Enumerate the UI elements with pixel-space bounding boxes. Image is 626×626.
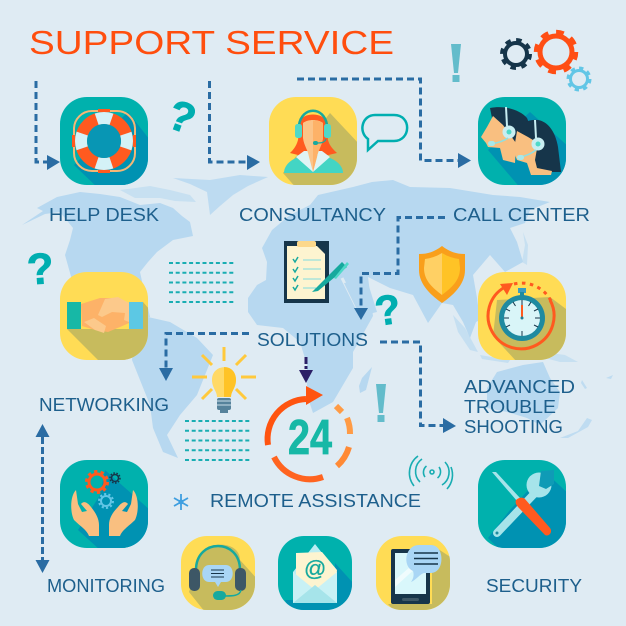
icon: headset [181,536,258,612]
icon: gears [502,32,590,90]
icon: help desk lifebuoy [60,97,150,190]
icon: 24 hours clock [268,386,350,479]
label: networking: NETWORKING [39,395,169,415]
icon: wireless signal [409,456,453,489]
label: help desk: HELP DESK [49,205,159,225]
label: consultancy: CONSULTANCY [239,205,386,225]
dotted lines lower [185,421,250,460]
icon: speech bubble outline [362,115,407,150]
label: call center: CALL CENTER [453,205,590,225]
arrow: call center to solutions [354,218,445,320]
arrow: solutions to troubleshooting [380,342,456,433]
label: advanced trouble shooting: ADVANCED [464,377,575,397]
dotted lines upper [169,263,235,302]
icon: security tools [478,460,570,550]
arrow: to call center [297,79,471,168]
icon: shield [419,246,465,303]
label: advanced trouble shooting: SHOOTING [464,417,563,437]
arrow: solutions to networking [159,334,249,381]
arrow: networking monitoring double arrow [36,424,50,573]
exclamation mark lower [376,384,386,422]
icon: asterisk [174,494,188,510]
label: remote assistance: REMOTE ASSISTANCE [210,491,421,511]
icon: monitoring hands and gears [60,460,150,550]
question mark left: ? [25,244,56,295]
icon: email envelope: @ [304,556,326,581]
icon: consultancy agent [269,97,360,190]
label: solutions: SOLUTIONS [257,330,368,350]
question mark near help desk: ? [162,90,202,143]
icon: email envelope [278,536,355,612]
icon: call center heads [478,97,570,190]
icon: clipboard and pen [284,241,349,303]
exclamation mark top [451,44,461,82]
icon: tablet chat [376,536,455,612]
arrow: solutions to 24 [299,357,313,383]
icon: stopwatch [478,272,570,362]
label: security: SECURITY [486,576,582,596]
arrow: to help desk [36,81,60,170]
label: monitoring: MONITORING [47,576,165,596]
arrow: to consultancy [210,81,260,170]
label: advanced trouble shooting [464,377,575,437]
title: SUPPORT SERVICE [29,25,394,62]
question mark center: ? [372,285,404,335]
label: advanced trouble shooting: TROUBLE [464,397,556,417]
icon: handshake [60,272,150,362]
icon: 24 hours clock: 24 [288,411,332,465]
world map [22,175,613,458]
icon: light bulb [192,347,256,413]
